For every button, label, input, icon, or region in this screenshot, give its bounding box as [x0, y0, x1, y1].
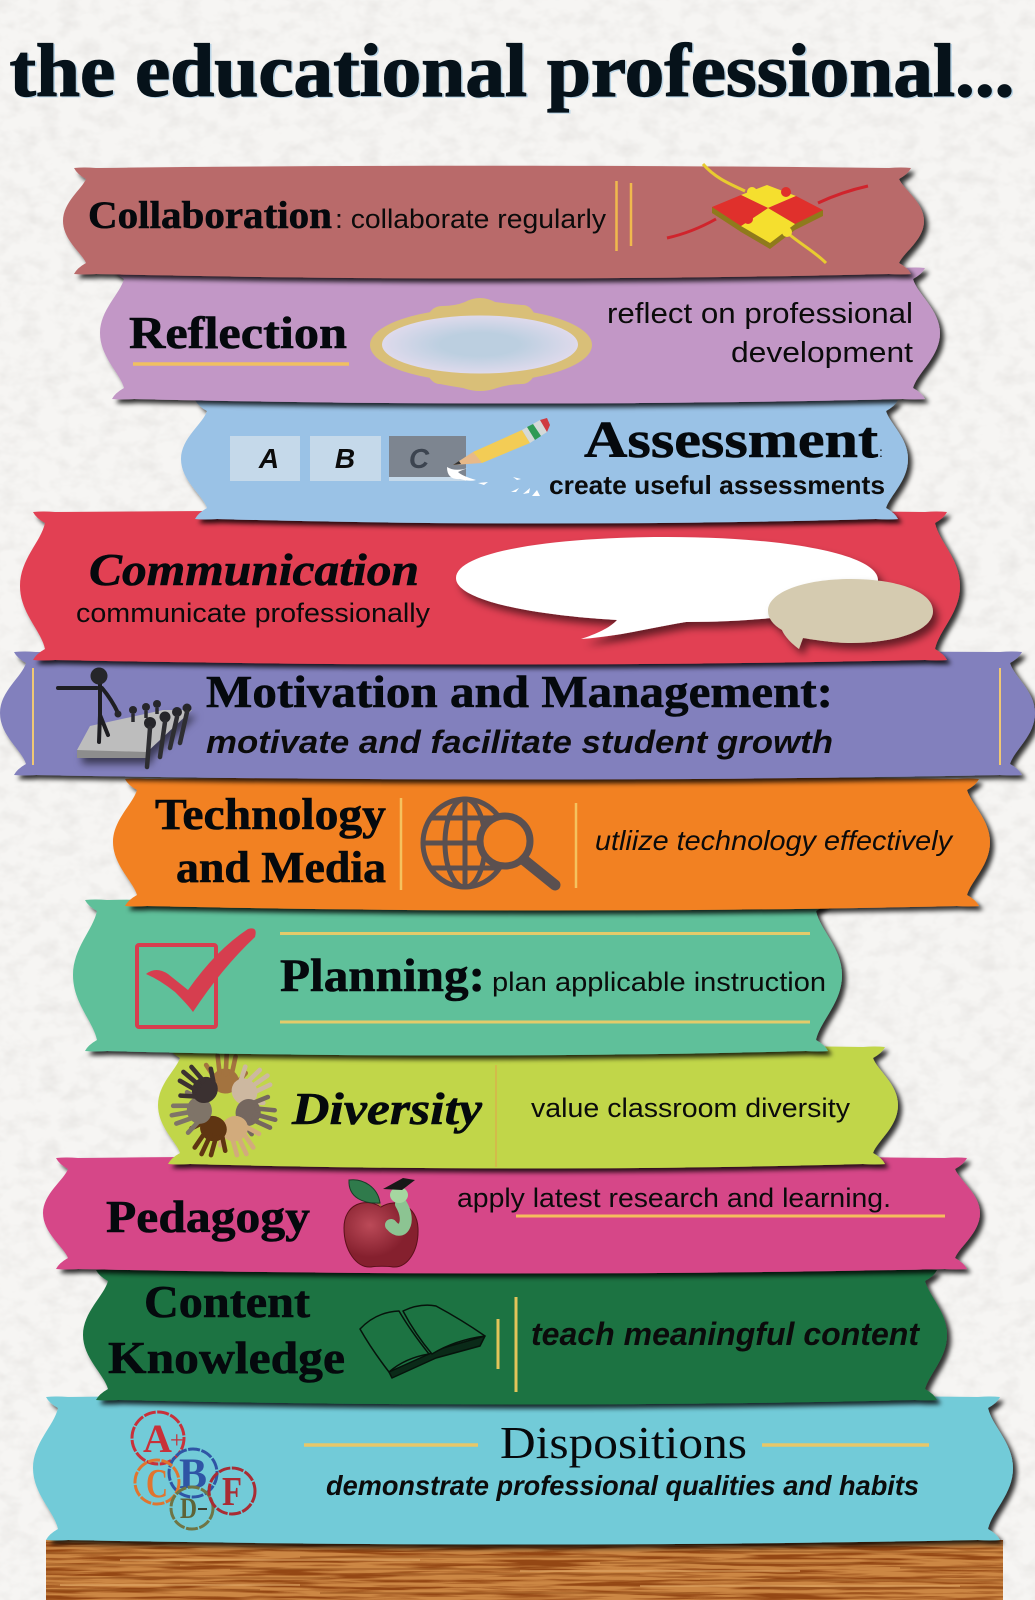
planning description: plan applicable instruction	[492, 967, 826, 997]
collaboration heading: Collaboration	[88, 194, 332, 237]
icon: mirror	[370, 298, 592, 391]
icon: puzzle pieces with wires	[667, 164, 868, 263]
panel: motivation and management	[0, 650, 1035, 780]
reflection description: reflect on professional	[607, 298, 913, 330]
reflection heading: Reflection	[129, 307, 347, 358]
dispositions heading: Dispositions	[500, 1417, 747, 1468]
assessment heading: :	[879, 444, 883, 460]
icon: pencil	[447, 418, 550, 496]
panel: dispositions	[33, 1395, 1013, 1544]
dispositions description: demonstrate professional qualities and habits	[326, 1470, 919, 1501]
panel: collaboration	[63, 164, 924, 278]
icon: checkbox	[137, 928, 256, 1027]
pedagogy description: apply latest research and learning.	[457, 1183, 891, 1213]
grade boxes	[230, 436, 466, 481]
reflection description: development	[731, 337, 913, 369]
pedagogy heading: Pedagogy	[106, 1191, 310, 1242]
motivation heading: Motivation and Management:	[206, 666, 833, 717]
title: the educational professional...	[10, 30, 1014, 113]
communication heading: Communication	[89, 545, 419, 595]
panel: content knowledge	[83, 1268, 947, 1404]
panel: diversity	[158, 1045, 898, 1168]
icon: letter grades: B	[179, 1451, 207, 1498]
grade boxes: C	[409, 443, 430, 474]
grade boxes: B	[335, 443, 355, 474]
panel: planning	[73, 898, 842, 1056]
icon: apple with worm	[344, 1178, 418, 1267]
assessment description: create useful assessments	[549, 470, 885, 500]
title: the educational professional...	[11, 31, 1016, 114]
icon: white speech bubble	[456, 537, 878, 639]
icon: open book	[360, 1305, 485, 1378]
grade boxes: A	[258, 443, 279, 474]
content knowledge description: teach meaningful content	[531, 1316, 920, 1352]
panel: communication	[20, 510, 960, 664]
diversity description: value classroom diversity	[531, 1093, 851, 1123]
icon: letter grades: C	[146, 1460, 168, 1506]
panel: pedagogy	[43, 1156, 980, 1274]
icon: leader and team figures	[58, 668, 192, 767]
icon: letter grades: A	[143, 1416, 172, 1461]
motivation description: motivate and facilitate student growth	[206, 724, 833, 760]
panel: assessment	[181, 398, 908, 524]
technology description: utliize technology effectively	[595, 825, 954, 856]
icon: circle of hands	[168, 1052, 280, 1162]
content knowledge heading: Knowledge	[108, 1332, 345, 1383]
reflection description	[607, 298, 913, 369]
diversity heading: Diversity	[291, 1083, 483, 1134]
collaboration description: : collaborate regularly	[335, 204, 607, 234]
icon: letter grades	[132, 1412, 255, 1529]
content knowledge heading	[108, 1276, 345, 1383]
communication description: communicate professionally	[76, 598, 431, 628]
icon: letter grades: +	[170, 1428, 184, 1454]
technology heading: Technology	[155, 790, 386, 839]
panel: technology and media	[113, 777, 990, 910]
planning heading: Planning:	[280, 950, 485, 1002]
assessment heading: Assessment	[584, 412, 879, 469]
icon: tan speech bubble	[768, 579, 933, 649]
icon: globe and magnifier	[423, 799, 555, 887]
technology heading: and Media	[176, 843, 386, 892]
panel: reflection	[100, 266, 940, 404]
technology heading	[155, 790, 386, 892]
icon: letter grades: F	[222, 1468, 242, 1514]
wooden desk	[46, 1540, 1003, 1600]
icon: letter grades: D	[180, 1492, 197, 1525]
content knowledge heading: Content	[144, 1276, 311, 1327]
